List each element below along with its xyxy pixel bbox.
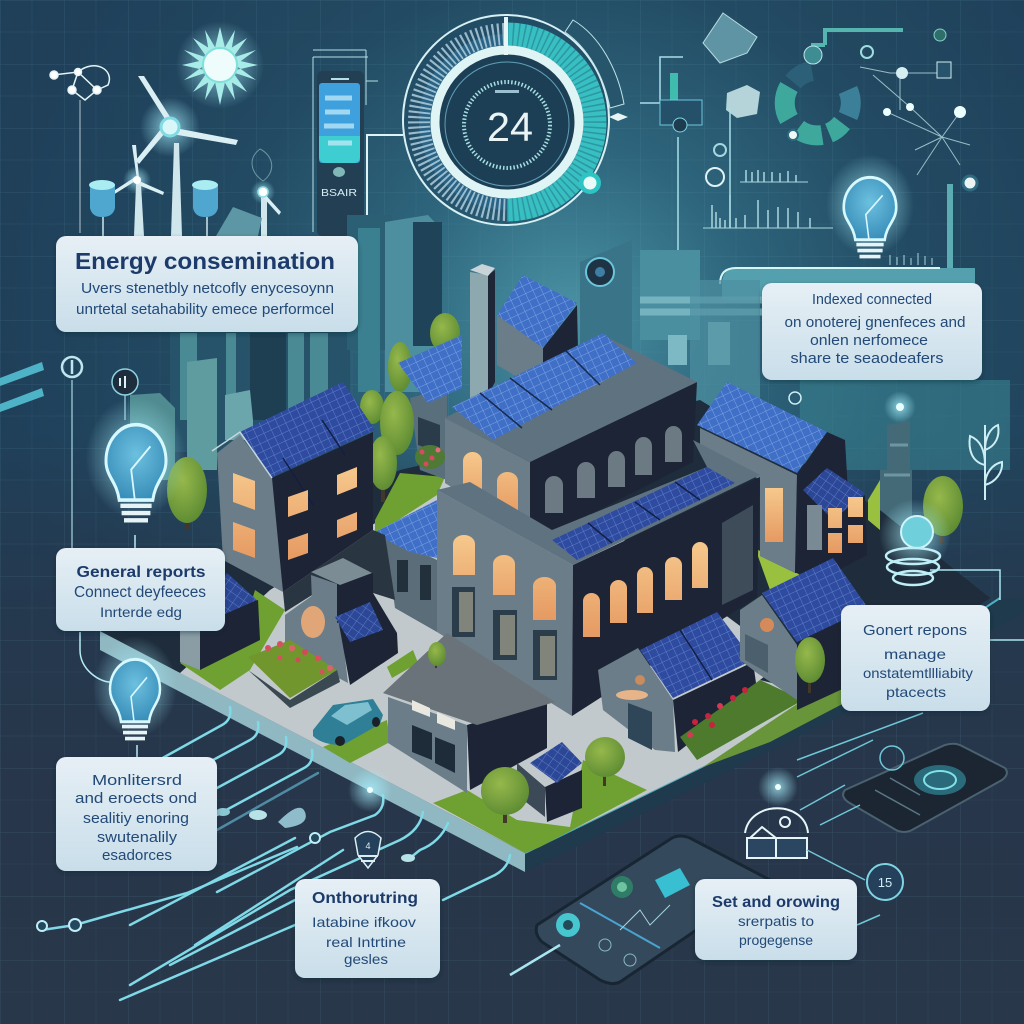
card: general reports left: Connect deyfeeces <box>74 584 206 601</box>
card: onboarding: real Intrtine <box>326 934 406 950</box>
icon: plant <box>970 425 1002 500</box>
icon: molecule nodes <box>50 66 109 233</box>
small charts and left nodes <box>640 57 730 282</box>
card: monitored: esadorces <box>102 848 172 864</box>
icon: no-sign circle <box>62 357 82 377</box>
cube <box>726 85 760 118</box>
card: general reports right: ptacects <box>886 684 946 700</box>
chimney tower <box>470 264 495 402</box>
card: connected reports: share te seaodeafers <box>790 350 944 367</box>
sapling on roof <box>428 642 446 666</box>
card: general reports left: General reports <box>76 564 206 581</box>
tree: back of centre <box>430 313 460 353</box>
tree: front <box>481 767 529 823</box>
lower roof solar panels <box>552 467 735 560</box>
tree: centre left lower <box>369 436 397 502</box>
icon: small bulb above onboarding card: 4 <box>365 841 371 851</box>
tower right with glow <box>880 391 916 527</box>
lawns <box>180 590 285 690</box>
storage tanks <box>89 180 218 236</box>
tree: centre left tall <box>380 391 414 455</box>
wind turbine: small left <box>112 145 164 236</box>
shadow wall behind centre left house <box>283 530 395 612</box>
connector lines right <box>930 570 1024 640</box>
circular dial gauge: 24 <box>487 104 533 150</box>
house: far left low <box>180 573 260 670</box>
wind turbine: large <box>136 76 238 236</box>
circuit nodes and icons <box>37 808 415 931</box>
phone: bottom centre <box>536 836 770 984</box>
tree: front right <box>585 737 625 786</box>
connector line left <box>72 380 137 757</box>
flower bed: left <box>248 640 340 708</box>
phone: top <box>313 50 378 236</box>
house: right solar <box>740 558 868 710</box>
light bulb: left upper <box>86 397 186 520</box>
skyscrapers left <box>130 207 442 480</box>
house wing: right small <box>803 468 867 572</box>
circuit lines: right <box>797 713 923 925</box>
icon: small bulb above onboarding card <box>355 832 381 868</box>
glowing bulb: right coil <box>879 499 951 585</box>
card: general reports right: Gonert repons <box>863 622 967 639</box>
card: energy conservation <box>56 236 358 332</box>
card: set and growing: srerpatis to <box>738 914 814 929</box>
icon: sun <box>176 21 264 109</box>
glow spark: centre platform edge <box>348 768 392 812</box>
card: general reports right: manage <box>884 646 946 662</box>
card: connected reports: Indexed connected <box>812 292 932 308</box>
wind turbine: small right <box>251 149 281 236</box>
card: set and growing <box>695 879 857 960</box>
vertical pipe right <box>950 176 977 282</box>
tree: back left of centre <box>388 342 412 392</box>
icon: map pin <box>112 369 138 395</box>
card: monitored: swutenalily <box>97 830 178 846</box>
card: connected reports <box>762 283 982 380</box>
phone: top: BSAIR <box>321 187 357 199</box>
light bulb: left lower <box>93 637 177 739</box>
main building upper block <box>445 333 697 540</box>
donut chart <box>785 71 851 135</box>
house: front small solar <box>517 742 582 822</box>
crystal shape <box>703 13 757 63</box>
isometric platform <box>100 400 1024 872</box>
connector line from dial <box>367 135 403 236</box>
house: blue roof behind main building <box>373 500 437 632</box>
main building lower block <box>437 440 760 716</box>
main building <box>437 333 760 716</box>
phone: bottom right <box>843 744 1007 832</box>
icon: house outline with arch <box>745 808 808 858</box>
card: set and growing: Set and orowing <box>712 894 840 911</box>
icon bars left edge <box>0 362 44 412</box>
bright panel under chart <box>720 268 975 300</box>
card: energy conservation: Uvers stenetbly netcofly enycesoynn <box>81 280 334 297</box>
network lines <box>860 67 970 175</box>
badge: 15 circle <box>867 864 903 900</box>
card: connected reports: on onoterej gnenfeces and <box>784 314 966 331</box>
glow line below phone <box>510 945 560 975</box>
flower bed: back <box>415 445 445 469</box>
tree: right of lawn <box>795 637 825 693</box>
card: set and growing: progegense <box>739 932 813 948</box>
house: back centre <box>497 275 578 392</box>
roof solar panels <box>452 333 637 440</box>
card: onboarding: Onthorutring <box>312 890 418 907</box>
card: onboarding: gesles <box>344 951 388 967</box>
tree: far right <box>923 476 963 544</box>
house: left with solar roof <box>212 382 375 592</box>
house: small centre left <box>285 558 398 685</box>
car <box>313 699 383 746</box>
card: general reports right: onstatemtllliabity <box>863 665 973 681</box>
light bulb: upper right <box>826 155 914 257</box>
card: general reports right <box>841 605 990 711</box>
top right data diagram <box>640 13 970 282</box>
card: general reports left: Inrterde edg <box>100 604 182 620</box>
upper windows <box>463 452 518 517</box>
house: back left solar <box>398 335 462 480</box>
card: onboarding: Iatabine ifkoov <box>312 914 416 930</box>
card: monitored: sealitiy enoring <box>83 811 189 827</box>
hedge: right flowers <box>680 680 803 760</box>
pin icon: top centre <box>586 258 614 286</box>
card: monitored: Monlitersrd <box>92 773 182 789</box>
glow spark: bottom right <box>758 767 798 807</box>
card: energy conservation: Energy consemination <box>75 248 335 274</box>
card: energy conservation: unrtetal setahability emece performcel <box>76 302 334 318</box>
lower left windows <box>453 535 556 620</box>
card: general reports left <box>56 548 225 631</box>
house: back right solar <box>697 382 848 573</box>
card: onboarding <box>295 879 440 978</box>
tree: left small <box>360 390 384 424</box>
teal pipe <box>813 30 903 52</box>
circular dial gauge <box>403 15 628 225</box>
badge: 15 circle: 15 <box>878 875 892 890</box>
house: front centre <box>383 633 555 793</box>
card: monitored: and eroects ond <box>75 791 197 807</box>
card: connected reports: onlen nerfomece <box>810 332 928 349</box>
backdrop towers right <box>580 240 1010 470</box>
house: front right solar <box>598 612 757 752</box>
circuit lines: bottom left <box>42 707 510 1000</box>
tree: left house <box>167 457 207 530</box>
lower right windows <box>583 542 708 637</box>
card: monitored <box>56 757 217 871</box>
